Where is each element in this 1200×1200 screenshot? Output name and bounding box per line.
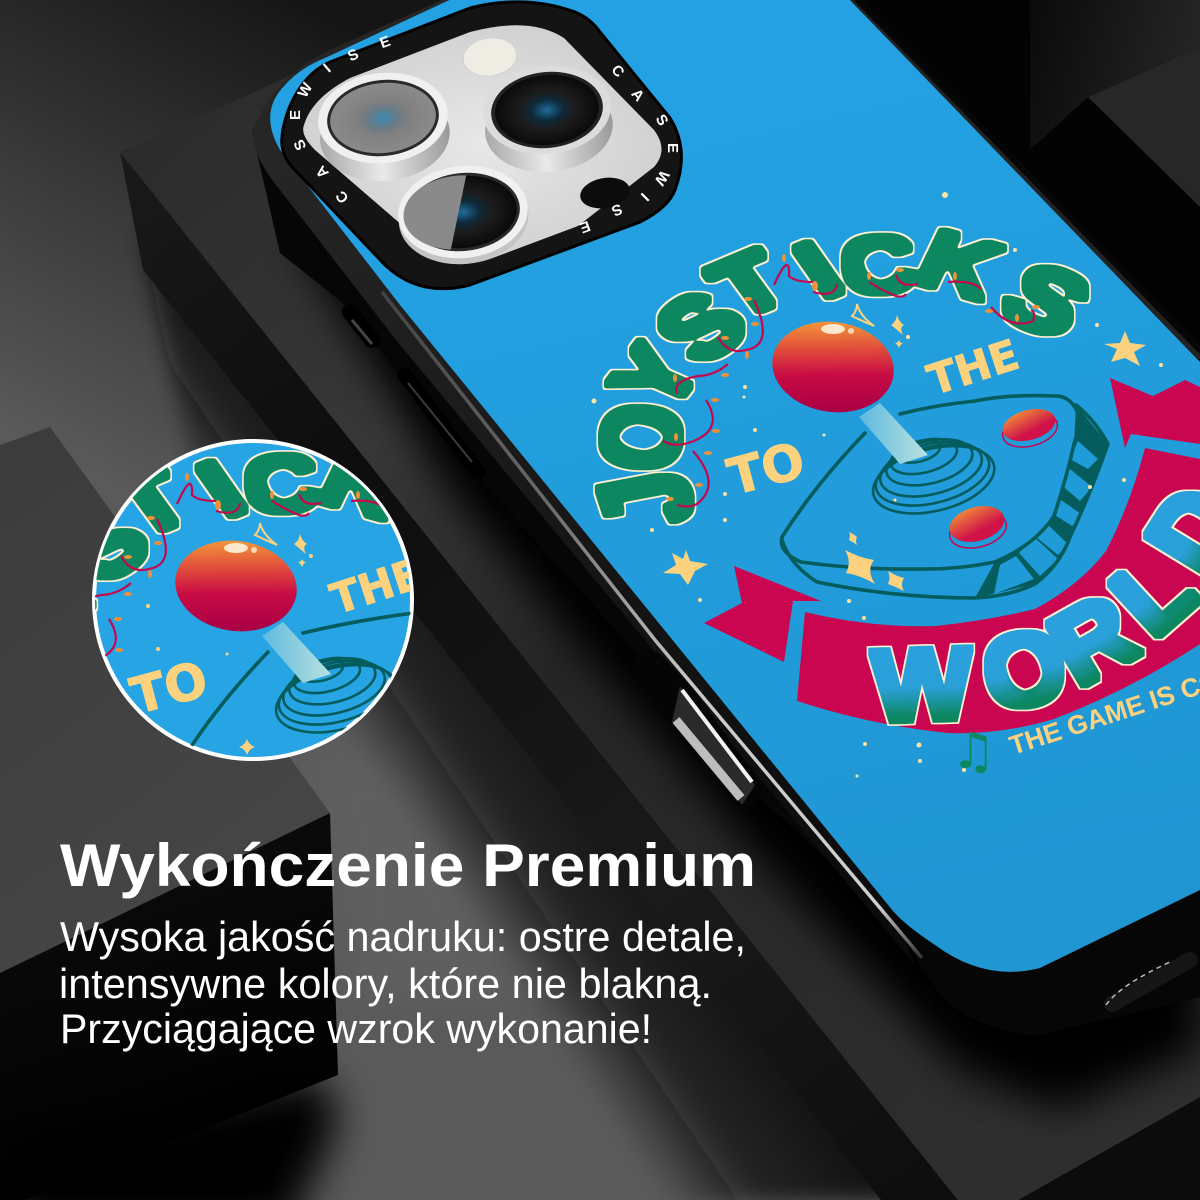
inset bulbs xyxy=(114,473,360,652)
heading JOYSTICKS: C xyxy=(833,217,923,313)
fairy light strings xyxy=(663,265,1034,506)
inset outline sparkle xyxy=(255,523,277,545)
camera ring lettering: E xyxy=(287,110,304,120)
lens top left xyxy=(314,66,454,187)
heading JOYSTICKS: Y xyxy=(587,331,723,421)
joystick stick xyxy=(859,403,928,464)
body text: Przyciągające wzrok wykonanie! xyxy=(60,1005,652,1052)
inset: detail magnifier xyxy=(92,439,414,761)
camera ring lettering xyxy=(287,33,681,236)
fairy light bulbs xyxy=(666,254,1040,501)
inset base rings xyxy=(274,656,392,734)
case rim xyxy=(252,0,915,965)
camera ring lettering: C xyxy=(608,62,628,81)
camera bump ring xyxy=(282,2,681,289)
camera ring lettering: E xyxy=(664,143,681,153)
camera ring lettering: W xyxy=(650,167,673,189)
camera ring lettering: S xyxy=(652,112,671,129)
side button small xyxy=(350,312,372,344)
camera ring lettering: S xyxy=(609,200,625,219)
camera ring lettering: I xyxy=(637,189,652,204)
controller body xyxy=(781,396,1108,598)
inset heading letters: K xyxy=(307,432,418,535)
heading JOYSTICKS: O xyxy=(573,397,709,477)
inset heading letters xyxy=(95,450,390,613)
inset heading letters: C xyxy=(236,436,326,532)
body text xyxy=(59,913,746,1052)
camera ring lettering: A xyxy=(628,86,648,105)
lens top right xyxy=(479,60,617,178)
camera ring lettering: I xyxy=(320,61,334,76)
inset light strings xyxy=(95,482,381,657)
joystick base rings xyxy=(872,438,996,515)
body text: Wysoka jakość nadruku: ostre detale, xyxy=(60,913,746,960)
body text: intensywne kolory, które nie blakną. xyxy=(59,960,712,1007)
side button long xyxy=(405,375,478,472)
camera ring lettering: S xyxy=(345,46,361,65)
lens bottom xyxy=(394,159,533,271)
heading JOYSTICKS: K xyxy=(904,213,1015,316)
camera ring lettering: A xyxy=(312,162,332,181)
label THE: THE xyxy=(922,330,1025,405)
music note: ♫ xyxy=(951,722,996,780)
camera ring lettering: E xyxy=(378,33,393,52)
label TO: TO xyxy=(722,431,811,507)
inset button xyxy=(405,640,406,643)
heading WORLD: W xyxy=(870,625,974,743)
buttons xyxy=(948,408,1058,549)
camera ring lettering: E xyxy=(577,217,592,236)
inset TO: TO xyxy=(125,650,214,726)
joystick ball xyxy=(772,322,894,412)
heading JOYSTICKS: S xyxy=(632,274,770,379)
heading JOYSTICKS: J xyxy=(571,462,722,538)
flash xyxy=(461,34,519,80)
controller side band xyxy=(975,405,1108,598)
inset heading letters: I xyxy=(181,444,262,533)
block: lower left xyxy=(0,427,340,1200)
stars and sparkles xyxy=(663,315,1146,591)
block: top right corner xyxy=(857,0,1200,362)
heading JOYSTICKS xyxy=(593,226,1091,526)
heading JOYSTICKS: S xyxy=(981,244,1111,357)
title: Wykończenie Premium xyxy=(60,832,756,899)
silver side button xyxy=(650,668,755,805)
rim highlight xyxy=(382,292,922,958)
outline sparkle xyxy=(852,304,874,326)
heading WORLD: R xyxy=(1030,571,1155,707)
confetti dots xyxy=(592,192,1163,778)
heading WORLD xyxy=(866,490,1200,726)
artwork: joysticks print xyxy=(571,192,1200,780)
inset stick xyxy=(262,622,331,683)
camera glass plate xyxy=(303,25,662,263)
phone case xyxy=(252,0,1200,1036)
camera ring lettering: S xyxy=(291,137,310,153)
inset sparkles xyxy=(146,534,313,755)
camera ring lettering: W xyxy=(295,79,317,101)
ribbon xyxy=(704,378,1200,733)
sensor hole xyxy=(578,174,632,212)
camera ring lettering: C xyxy=(332,187,352,206)
inset heading letters: T xyxy=(95,452,208,553)
heading WORLD: O xyxy=(971,604,1078,734)
inset controller outline xyxy=(185,613,413,756)
charging port xyxy=(1106,960,1190,1005)
heading JOYSTICKS: T xyxy=(692,233,805,334)
phone shadow xyxy=(290,230,1200,1110)
heading JOYSTICKS: I xyxy=(778,225,859,314)
side band windows xyxy=(994,441,1098,594)
inset THE: THE xyxy=(325,549,428,624)
phone back blue xyxy=(270,0,1200,972)
inset ball xyxy=(175,540,297,632)
inset heading letters: S xyxy=(35,493,173,598)
